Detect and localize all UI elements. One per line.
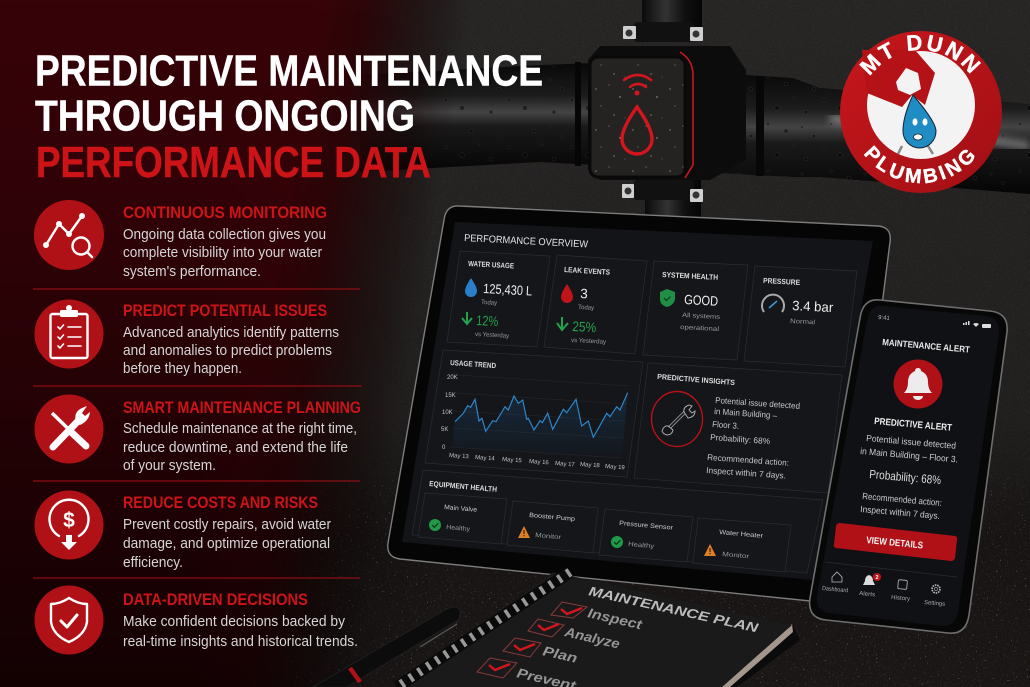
item: data-driven decisions: real-time insights and historical trends.	[123, 634, 358, 650]
panel: predictive insights: Recommended action:	[707, 452, 789, 468]
pen	[313, 607, 460, 687]
arrow: down	[557, 317, 568, 330]
icon: shield check	[34, 586, 104, 654]
tablet heading: PERFORMANCE OVERVIEW	[464, 233, 589, 251]
item: data-driven decisions: DATA-DRIVEN DECISIONS	[123, 591, 308, 609]
title: THROUGH ONGOING	[35, 92, 415, 140]
tablet	[388, 206, 890, 603]
item: continuous monitoring	[34, 200, 327, 280]
card: system health: All systems	[682, 312, 721, 321]
status bar: 9:41	[878, 315, 891, 322]
card: water usage	[447, 251, 550, 347]
item: predict potential issues: before they happen.	[123, 361, 242, 377]
card: main valve: Main Valve	[444, 504, 478, 514]
mascot water drop	[898, 95, 936, 154]
logo text: MT DUNN	[859, 34, 981, 76]
notebook: maintenance plan	[397, 572, 800, 687]
card: pressure: 3.4 bar	[792, 298, 834, 315]
chart: usage trend: 0	[442, 445, 446, 451]
phone heading: MAINTENANCE ALERT	[882, 337, 971, 355]
phone: PREDICTIVE ALERT	[874, 416, 953, 434]
status bar	[878, 315, 991, 328]
background	[274, 0, 1030, 687]
logo text: PLUMBING	[864, 145, 974, 184]
arrow: down	[462, 312, 472, 324]
card: booster pump	[507, 501, 598, 553]
panel: benefits list	[33, 200, 362, 654]
panel: predictive insights: Floor 3.	[712, 419, 739, 431]
card: water usage: Today	[481, 299, 498, 307]
chart: usage trend: 10K	[442, 410, 453, 416]
item: continuous monitoring: system's performance.	[123, 264, 261, 280]
item: reduce costs and risks	[34, 490, 331, 571]
panel: predictive insights: Potential issue detected	[715, 395, 801, 411]
card: leak events: Today	[578, 304, 595, 312]
phone: Potential issue detected	[866, 433, 956, 451]
item: reduce costs and risks: damage, and optimize operational	[123, 536, 330, 552]
chart: usage trend: May 14	[475, 455, 496, 462]
tab: history: History	[891, 595, 910, 603]
icon: green shield	[660, 289, 675, 307]
card: pressure sensor	[599, 509, 693, 562]
item: data-driven decisions	[34, 586, 358, 654]
title: PREDICTIVE MAINTENANCE	[35, 46, 543, 96]
phone: Probability: 68%	[869, 467, 942, 487]
icon: gauge	[762, 295, 784, 312]
chart: usage trend: USAGE TREND	[450, 358, 497, 370]
item: predict potential issues: PREDICT POTENTIAL ISSUES	[123, 302, 327, 320]
item: smart maintenance planning: of your system.	[123, 458, 216, 474]
tab bar	[822, 572, 945, 608]
card: water heater	[693, 518, 791, 572]
icon: wrench in circle	[652, 392, 702, 446]
item: smart maintenance planning	[34, 394, 361, 474]
icon: red drop	[561, 284, 573, 303]
phone: in Main Building – Floor 3.	[860, 446, 958, 465]
phone	[810, 300, 1007, 633]
chart: usage trend: 5K	[441, 427, 448, 433]
card: main valve	[418, 493, 507, 544]
item: continuous monitoring: Ongoing data collection gives you	[123, 227, 326, 243]
card: system health	[643, 261, 748, 360]
chart: usage trend: May 16	[529, 459, 550, 466]
chart: usage trend: May 17	[555, 461, 576, 468]
icon: dollar with down arrow	[34, 490, 104, 560]
item: smart maintenance planning: Schedule maintenance at the right time,	[123, 421, 357, 437]
item: continuous monitoring: CONTINUOUS MONITORING	[123, 204, 327, 222]
card: system health: SYSTEM HEALTH	[662, 270, 718, 282]
icon: chart and magnifier	[34, 200, 104, 270]
checklist: Analyze	[562, 624, 622, 652]
item: smart maintenance planning: SMART MAINTENANCE PLANNING	[123, 399, 361, 417]
checklist: Inspect	[586, 605, 644, 632]
mounting bolts	[622, 26, 703, 202]
chart: usage trend: May 19	[605, 464, 626, 471]
panel: predictive insights	[634, 363, 842, 493]
panel: predictive insights: Probability: 68%	[710, 432, 771, 446]
card: pressure	[744, 266, 857, 367]
icon: clipboard checklist	[34, 300, 104, 368]
card: water usage: 12%	[476, 312, 499, 329]
panel: predictive insights: PREDICTIVE INSIGHTS	[657, 372, 735, 387]
item: predict potential issues: Advanced analytics identify patterns	[123, 325, 339, 341]
phone: Inspect within 7 days.	[860, 504, 940, 521]
card: booster pump: Booster Pump	[529, 512, 576, 523]
left panel shading	[0, 0, 454, 687]
chart: usage trend: 15K	[445, 393, 456, 399]
card: leak events: 25%	[572, 318, 597, 335]
card: leak events: vs Yesterday	[571, 337, 607, 346]
card: water heater: Monitor	[722, 551, 750, 560]
icon: wifi signal	[624, 75, 651, 95]
tab: alerts	[859, 573, 881, 598]
spiral binding	[397, 572, 570, 687]
card: main valve: Healthy	[446, 524, 471, 533]
button: view details: VIEW DETAILS	[866, 535, 924, 551]
icon: alert bell	[894, 360, 942, 408]
card: leak events: LEAK EVENTS	[564, 265, 610, 277]
card: water usage: vs Yesterday	[475, 331, 510, 340]
checklist: Plan	[541, 643, 579, 666]
card: system health: GOOD	[684, 292, 719, 309]
panel: equipment health: EQUIPMENT HEALTH	[429, 479, 497, 494]
item: predict potential issues: and anomalies to predict problems	[123, 343, 332, 359]
card: pressure sensor: Pressure Sensor	[619, 520, 674, 532]
item: reduce costs and risks: REDUCE COSTS AND RISKS	[123, 494, 318, 512]
card: leak events: 3	[580, 286, 588, 301]
card: pressure: PRESSURE	[763, 276, 800, 287]
smart leak sensor	[588, 22, 746, 202]
icon: dollar with down arrow: $	[63, 509, 75, 532]
chart: usage trend: May 13	[449, 453, 470, 460]
card: system health: operational	[680, 324, 720, 333]
panel: predictive insights: Inspect within 7 days.	[706, 465, 786, 481]
notebook heading: MAINTENANCE PLAN	[587, 583, 760, 636]
water pipes	[360, 0, 1030, 220]
logo: Mt Dunn Plumbing	[840, 31, 1002, 193]
button: view details	[834, 523, 957, 561]
tab: alerts: Alerts	[859, 591, 875, 598]
phone: Recommended action:	[862, 491, 942, 508]
item: reduce costs and risks: efficiency.	[123, 555, 183, 571]
item: reduce costs and risks: Prevent costly repairs, avoid water	[123, 517, 331, 533]
card: pressure sensor: Healthy	[628, 541, 655, 550]
card: water heater: Water Heater	[719, 529, 764, 540]
checklist	[477, 602, 644, 687]
tab: settings: Settings	[924, 600, 945, 608]
wrench	[862, 50, 935, 107]
card: booster pump: Monitor	[535, 532, 562, 541]
logo text	[859, 34, 981, 184]
chart: usage trend: May 18	[580, 462, 601, 469]
icon: wrench and screwdriver	[34, 394, 104, 464]
card: leak events	[544, 255, 647, 354]
card: pressure: Normal	[790, 318, 816, 326]
chart: usage trend: 20K	[447, 375, 458, 381]
tab: alerts: 2	[875, 575, 879, 581]
item: data-driven decisions: Make confident decisions backed by	[123, 614, 346, 630]
tab: dashboard: Dashboard	[822, 586, 848, 594]
title: PERFORMANCE DATA	[36, 138, 431, 187]
icon: blue drop	[465, 278, 477, 297]
title	[35, 46, 543, 187]
item: predict potential issues	[34, 300, 339, 377]
chart: usage trend: May 15	[502, 457, 523, 464]
card: water usage: 125,430 L	[483, 281, 533, 299]
item: smart maintenance planning: reduce downtime, and extend the life	[123, 440, 348, 456]
icon: water drop	[622, 107, 652, 154]
panel: predictive insights: in Main Building –	[714, 406, 778, 420]
card: water usage: WATER USAGE	[468, 259, 514, 270]
panel: equipment health	[412, 470, 823, 573]
item: continuous monitoring: complete visibility into your water	[123, 245, 322, 261]
chart: usage trend	[425, 350, 643, 477]
